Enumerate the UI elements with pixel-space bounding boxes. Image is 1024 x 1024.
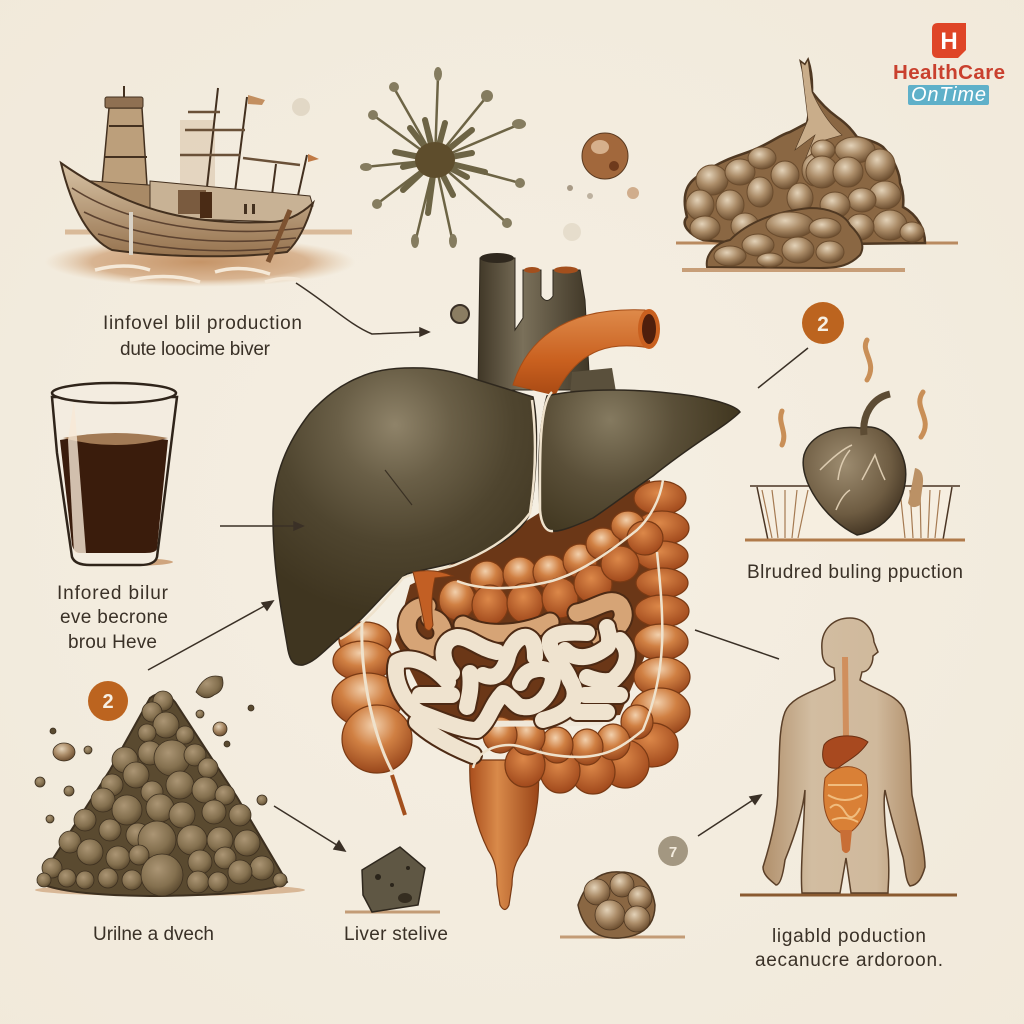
text: top-left caption: Iinfovel blil production (103, 313, 302, 334)
logo: HealthCare OnTime: H (940, 28, 958, 55)
badge: number 2 left: 2 (102, 691, 114, 713)
arrow: pile to rock (274, 806, 345, 851)
icon: dark rock (345, 847, 440, 912)
text: right caption: Blrudred buling ppuction (747, 562, 963, 583)
rectum (470, 760, 539, 910)
text: top-left caption (103, 313, 302, 360)
icon: gallbladder and duct lines (340, 392, 663, 815)
icon: small brown clump (292, 98, 639, 241)
icon: small intestine coils (396, 602, 627, 755)
icon: heart vessels and aorta (478, 253, 660, 395)
icon: intestines (332, 480, 690, 910)
text: glass caption (57, 583, 169, 653)
badge: number 7: 7 (669, 844, 677, 861)
shadow behind organs (395, 480, 660, 730)
text: person caption: ligabld poduction (772, 926, 926, 947)
icon: liver (273, 368, 740, 665)
text: pile caption: Urilne a dvech (93, 924, 214, 945)
text: person caption (755, 926, 943, 971)
logo: HealthCare OnTime (893, 23, 1005, 106)
icon: human figure with organs (740, 618, 957, 895)
arrow: intestine to person line (695, 630, 779, 659)
left colon (332, 622, 412, 773)
text: glass caption: brou Heve (68, 632, 157, 653)
icon: wooden ship with lighthouse (45, 86, 355, 287)
icon: glass of dark liquid (52, 383, 177, 566)
text: person caption: aecanucre ardoroon. (755, 950, 943, 971)
badge: number 2 top right (802, 302, 844, 344)
icon: spiky microbe (360, 67, 526, 248)
arrow: badge line to heart icon (758, 348, 808, 388)
badge: number 2 top right: 2 (817, 313, 829, 336)
icon: rock pile (35, 676, 305, 896)
text: rock caption: Liver stelive (344, 924, 448, 945)
arrow: badge to liver (148, 601, 273, 670)
badge: number 2 left (88, 681, 128, 721)
right and bottom colon (483, 481, 690, 794)
text: glass caption: eve becrone (60, 607, 168, 628)
icon: small dark dot (451, 305, 469, 323)
transverse colon (439, 511, 663, 625)
logo: HealthCare OnTime: OnTime (911, 84, 986, 106)
arrow: caption to heart (296, 283, 429, 336)
arrow: badge 7 to person (698, 795, 761, 836)
text: glass caption: Infored bilur (57, 583, 169, 604)
icon: dark heart in basket (745, 340, 965, 540)
icon: brown lumpy mass (676, 60, 958, 270)
arrow: glass to liver (220, 522, 303, 530)
text: top-left caption: dute loocime biver (120, 339, 271, 360)
icon: lumpy stone bottom (560, 872, 685, 938)
logo: HealthCare OnTime: HealthCare (893, 61, 1005, 84)
badge: number 7 (658, 836, 688, 866)
